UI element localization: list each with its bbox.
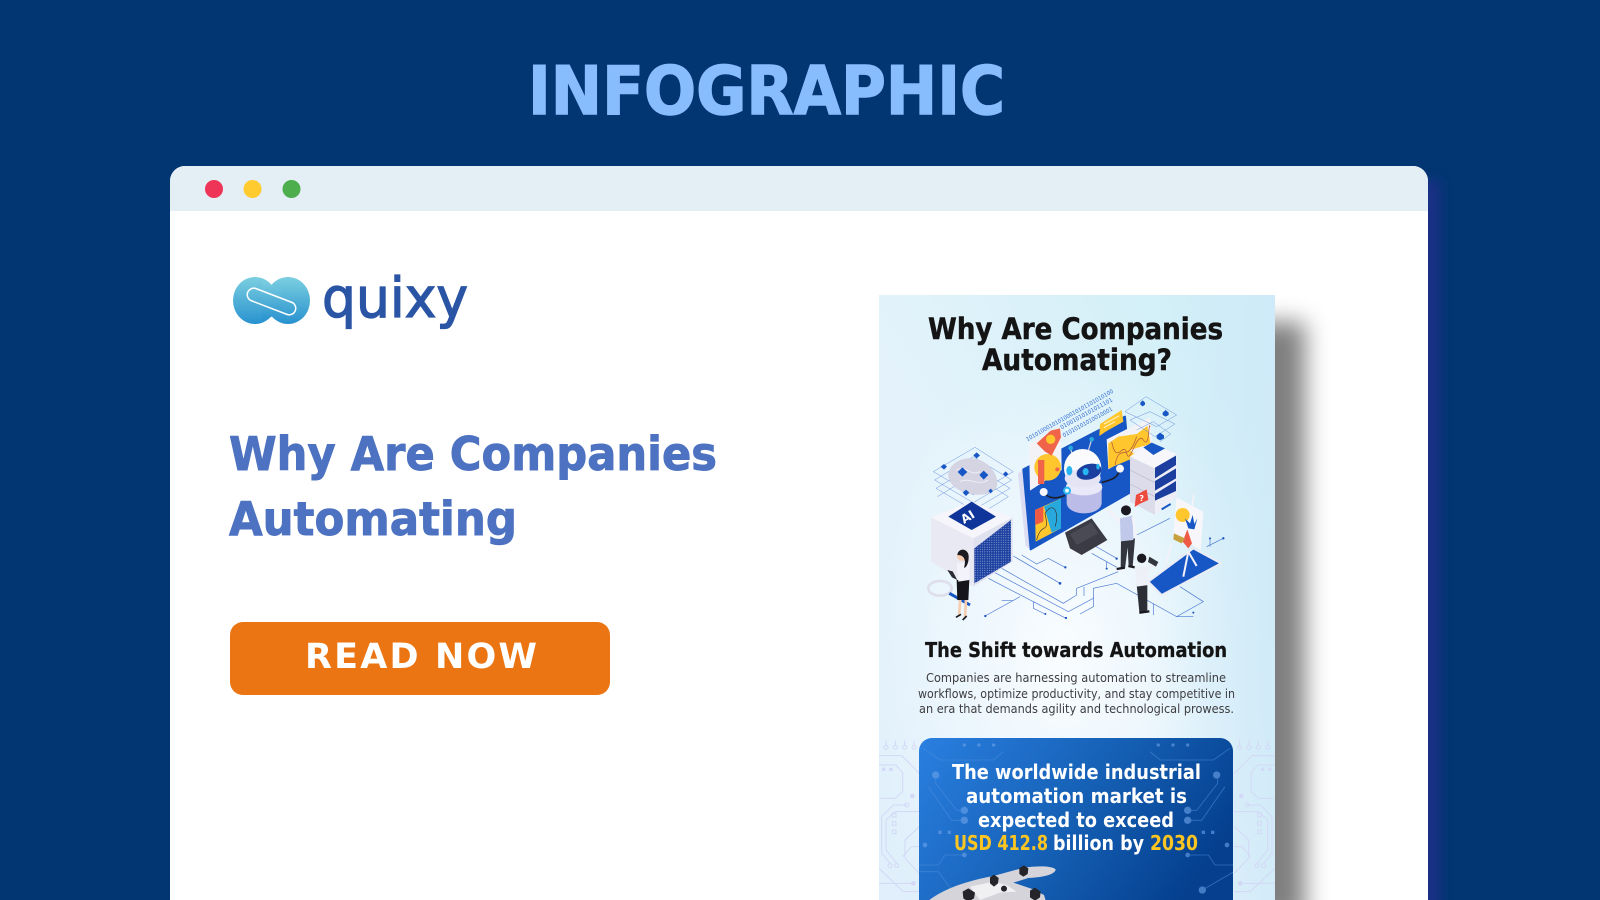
woman with tablet xyxy=(947,550,969,620)
panel statistic text xyxy=(952,760,1201,855)
panel statistic text: billion by xyxy=(1053,831,1144,855)
card title: Why Are Companies xyxy=(928,312,1223,346)
window body xyxy=(170,166,1428,900)
card shadow xyxy=(1200,322,1305,900)
illustration: isometric automation scene xyxy=(928,389,1224,620)
art panel on screen xyxy=(1035,498,1061,542)
yellow speech bubble xyxy=(1099,410,1123,436)
shift description xyxy=(918,670,1235,716)
binary data text: 01010101010010001 xyxy=(1062,407,1114,439)
panel statistic text: USD 412.8 xyxy=(954,831,1048,855)
browser window xyxy=(170,166,1440,900)
floating layers and cubes xyxy=(1125,397,1177,442)
panel statistic text: 2030 xyxy=(1150,831,1198,855)
brain with layers xyxy=(933,447,1013,517)
logo icon xyxy=(233,277,310,324)
panel statistic text: The worldwide industrial xyxy=(952,760,1201,784)
circuit lines xyxy=(985,518,1223,618)
read now button xyxy=(230,622,610,695)
robot hand xyxy=(928,865,1056,900)
logo wordmark: quixy xyxy=(322,266,468,330)
easel xyxy=(1165,495,1203,577)
shift heading: The Shift towards Automation xyxy=(925,638,1227,662)
heading: Why Are Companies xyxy=(229,427,717,481)
card background xyxy=(879,295,1275,900)
left chart panel xyxy=(1029,428,1062,491)
monitor stand xyxy=(1065,518,1107,555)
window buttons xyxy=(205,180,300,198)
data chart panel xyxy=(1107,417,1152,469)
man with raised arm xyxy=(1109,505,1136,569)
title: INFOGRAPHIC xyxy=(528,52,1005,130)
blue statistic panel xyxy=(919,738,1234,900)
question bubble: ? xyxy=(1139,494,1144,503)
read now button: READ NOW xyxy=(305,637,537,677)
AI server cube xyxy=(931,502,1013,587)
question bubble xyxy=(1135,489,1148,507)
man with tablet xyxy=(1135,554,1158,613)
logo: quixy xyxy=(233,266,468,330)
heading: Automating xyxy=(229,492,517,546)
card title xyxy=(928,312,1223,377)
circuit pattern: card sides xyxy=(879,741,1275,892)
robot xyxy=(1040,437,1124,513)
binary data text: 01001010101011101 xyxy=(1060,397,1114,431)
shift description: Companies are harnessing automation to streamline xyxy=(926,670,1226,685)
card title: Automating? xyxy=(982,343,1172,377)
AI server cube: AI xyxy=(958,507,977,527)
window shadow xyxy=(190,180,1440,900)
server rack xyxy=(1130,443,1177,515)
shift description: an era that demands agility and technological prowess. xyxy=(919,701,1234,716)
panel statistic text: automation market is xyxy=(966,784,1187,808)
shift description: workflows, optimize productivity, and stay competitive in xyxy=(918,686,1235,701)
infographic preview card xyxy=(879,295,1305,900)
tablet platform xyxy=(1148,548,1221,595)
magnifier xyxy=(928,581,970,605)
monitor xyxy=(1018,417,1132,555)
panel circuit pattern xyxy=(919,743,1234,897)
panel statistic text: expected to exceed xyxy=(978,808,1174,832)
circuit nodes xyxy=(984,537,1224,619)
window title bar xyxy=(170,166,1428,211)
binary data text: 101010001010100010101101010100 xyxy=(1025,389,1115,443)
heading xyxy=(229,427,717,546)
